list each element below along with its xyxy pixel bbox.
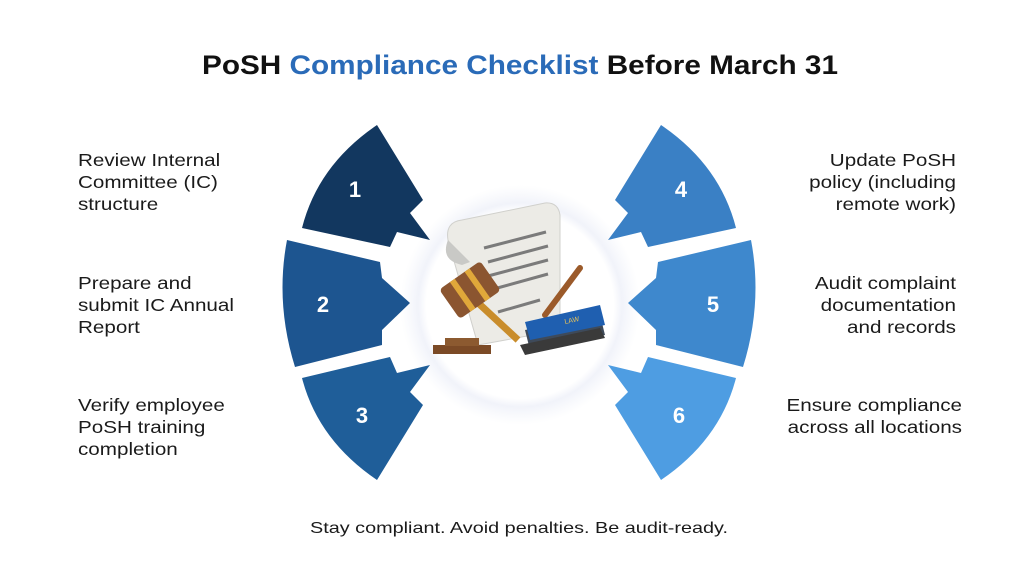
segment 5: 5 [707,292,719,317]
segment 3 [302,357,430,480]
text: item 2: Prepare and [78,274,192,294]
text: item 2: submit IC Annual [78,296,234,316]
text: item 5: documentation [821,296,956,316]
text: item 5: Audit complaint [815,274,957,294]
title: PoSH Compliance Checklist Before March 31 [202,50,838,80]
segment 5 [628,240,756,367]
text: item 3: completion [78,440,178,460]
segment 2 [282,240,410,367]
segment 4: 4 [675,177,688,202]
text: item 1: Review Internal [78,151,220,171]
segment 1: 1 [349,177,361,202]
text: item 3: PoSH training [78,418,205,438]
segment 6 [608,357,736,480]
footer tagline: Stay compliant. Avoid penalties. Be audit-ready. [310,520,728,537]
segment 2: 2 [317,292,329,317]
text: item 4: remote work) [836,195,956,215]
text: item 5: and records [847,318,956,338]
text: item 2: Report [78,318,141,338]
segment 4 [608,125,736,247]
center glow [400,185,640,425]
segment 1 [302,125,430,247]
text: item 4: Update PoSH [830,151,956,171]
text: item 6: Ensure compliance [787,396,962,416]
segment 3: 3 [356,403,368,428]
text: item 1: structure [78,195,158,215]
segment 6: 6 [673,403,685,428]
text: item 1: Committee (IC) [78,173,218,193]
icon: legal illustration: LAW [564,316,580,326]
text: item 4: policy (including [809,173,956,193]
text: item 6: across all locations [788,418,962,438]
text: item 3: Verify employee [78,396,225,416]
icon: legal illustration [433,203,605,355]
